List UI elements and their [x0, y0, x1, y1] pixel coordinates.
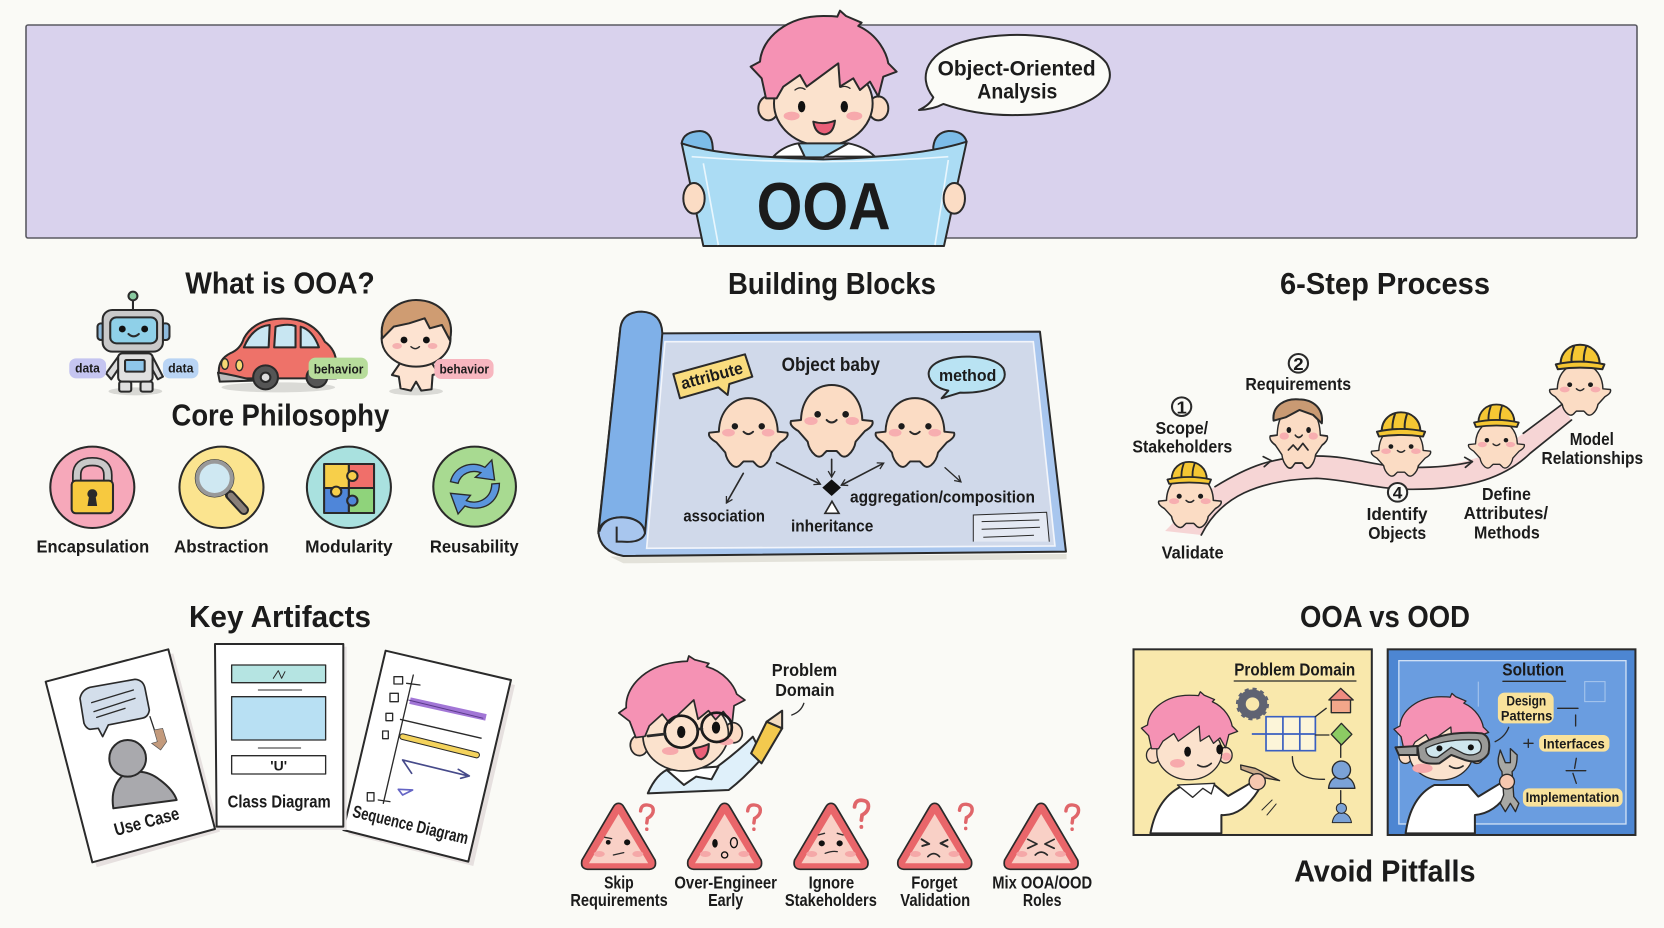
step model label: Relationships — [1542, 447, 1643, 468]
callout: method — [929, 357, 1005, 398]
panel: OOA vs OOD comparison — [1134, 649, 1635, 889]
step baby: requirements — [1270, 399, 1328, 468]
heading: Key Artifacts: Key Artifacts — [189, 599, 371, 634]
card: use case — [46, 649, 220, 867]
step baby: model relationships — [1550, 345, 1611, 415]
icon: abstraction magnifier — [179, 447, 263, 528]
label: Reusability: Reusability — [430, 536, 519, 557]
step 1 label: Scope/ — [1155, 417, 1208, 438]
pitfall: forget validation — [898, 803, 972, 910]
label: Problem Domain — [772, 659, 837, 700]
card: class diagram: Class Diagram — [228, 792, 331, 812]
object baby center — [791, 385, 873, 457]
heading: What is OOA?: What is OOA? — [185, 266, 375, 300]
blueprint sheet — [598, 312, 1067, 563]
step 2 label: Requirements — [1245, 373, 1351, 394]
pitfall: over-engineer early: Early — [708, 890, 743, 910]
step model label: Model — [1570, 428, 1614, 449]
icon: inheritance triangle — [825, 501, 839, 513]
road ribbon — [1165, 405, 1571, 535]
pitfall: mix OOA/OOD roles: Mix OOA/OOD — [992, 873, 1092, 892]
card: use case: Use Case — [112, 803, 181, 840]
step 2 label: 2 — [1293, 353, 1304, 374]
pitfall: ignore stakeholders: Stakeholders — [785, 890, 877, 910]
icon: robot — [97, 292, 169, 395]
scroll banner — [682, 131, 967, 246]
callout: method: method — [939, 366, 996, 385]
step baby: validate — [1159, 462, 1221, 528]
panel: process road with steps — [1132, 345, 1643, 562]
panel: problem domain — [1134, 649, 1372, 835]
card: class diagram: 'U' — [270, 758, 287, 774]
step 4 label: Identify — [1367, 503, 1428, 524]
panel: key artifacts cards — [46, 644, 515, 867]
hero mascot with OOA scroll — [682, 11, 967, 246]
step 4 label: Objects — [1368, 522, 1426, 543]
step define label — [1464, 483, 1548, 542]
step 1 label — [1132, 397, 1232, 457]
mascot with glasses and pencil — [612, 649, 804, 793]
hero banner — [26, 25, 1637, 238]
label: behavior pink — [434, 359, 494, 379]
card: sequence diagram — [343, 651, 515, 866]
step define label: Define — [1482, 483, 1531, 504]
pitfall: skip requirements: Skip — [604, 873, 634, 892]
icon: encapsulation padlock — [50, 447, 134, 528]
panel: solution: Patterns — [1501, 708, 1552, 724]
heading: Building Blocks: Building Blocks — [728, 266, 936, 301]
speech bubble: Object-Oriented Analysis: Analysis — [977, 80, 1057, 104]
section: What is OOA and Core Philosophy — [37, 266, 519, 557]
mascot head — [751, 11, 897, 157]
heading: Core Philosophy: Core Philosophy — [172, 398, 390, 433]
step 4 label: 4 — [1393, 484, 1403, 502]
panel: solution — [1388, 649, 1635, 835]
step validate label: Validate — [1162, 542, 1224, 562]
step define label: Attributes/ — [1464, 502, 1548, 523]
scroll title: OOA — [757, 170, 891, 244]
callout: attribute: attribute — [679, 358, 745, 393]
label: aggregation/composition: aggregation/composition — [850, 487, 1035, 506]
pitfall: ignore stakeholders: Ignore — [809, 873, 854, 892]
speech bubble: Object-Oriented Analysis: Object-Oriented — [938, 56, 1096, 80]
step 2 label — [1245, 353, 1351, 394]
label: data right: data — [168, 361, 194, 376]
label: data left — [69, 358, 106, 378]
step baby: define attributes — [1468, 404, 1524, 468]
step baby: identify objects — [1371, 412, 1431, 476]
speech bubble: Object-Oriented Analysis — [919, 35, 1110, 115]
step define label: Methods — [1474, 522, 1540, 542]
pitfall: forget validation: Forget — [911, 873, 958, 892]
pitfall: mix OOA/OOD roles: Roles — [1023, 890, 1062, 910]
label: behavior green — [309, 358, 368, 379]
panel: solution: Interfaces — [1543, 736, 1605, 752]
pitfall: mix OOA/OOD roles — [992, 803, 1092, 910]
heading: 6-Step Process: 6-Step Process — [1280, 266, 1490, 301]
label: Problem Domain: Domain — [775, 679, 834, 700]
object baby right — [876, 398, 954, 467]
label: behavior pink: behavior — [439, 362, 490, 376]
relationship arrows — [727, 459, 961, 503]
pitfall: ignore stakeholders — [785, 800, 877, 910]
label: Object baby: Object baby — [782, 355, 880, 376]
step 1 label: 1 — [1176, 397, 1187, 417]
panel: solution: Solution — [1502, 660, 1564, 680]
label: Modularity: Modularity — [305, 536, 393, 557]
label: data left: data — [75, 361, 100, 376]
icon: reusability arrows — [433, 447, 516, 527]
label: Problem Domain: Problem — [772, 659, 837, 680]
pitfall: over-engineer early — [674, 803, 777, 910]
panel: building blocks blueprint — [598, 312, 1067, 563]
panel: problem domain: Problem Domain — [1234, 660, 1355, 680]
icon: red car — [218, 319, 336, 392]
pitfall: forget validation: Validation — [900, 890, 970, 910]
label: data right — [163, 358, 198, 378]
heading: Avoid Pitfalls: Avoid Pitfalls — [1294, 854, 1476, 889]
object baby left — [709, 398, 788, 467]
label: association: association — [683, 507, 765, 526]
label: behavior green: behavior — [314, 362, 364, 376]
pitfall: skip requirements — [570, 803, 668, 910]
step 4 label — [1367, 483, 1428, 543]
icon: aggregation diamond — [822, 479, 841, 496]
heading: OOA vs OOD: OOA vs OOD — [1300, 599, 1470, 634]
panel: solution: Design — [1506, 693, 1546, 709]
label: inheritance: inheritance — [791, 517, 873, 536]
pitfall: skip requirements: Requirements — [570, 890, 668, 910]
step 1 label: Stakeholders — [1132, 436, 1232, 457]
panel: avoid pitfalls — [570, 649, 1092, 910]
label: Abstraction: Abstraction — [174, 536, 269, 557]
icon: modularity puzzle — [307, 447, 391, 528]
label: Encapsulation: Encapsulation — [37, 536, 149, 557]
pitfall: over-engineer early: Over-Engineer — [674, 873, 777, 892]
step model label — [1542, 428, 1643, 468]
card: class diagram — [215, 644, 347, 830]
card: sequence diagram: Sequence Diagram — [351, 801, 470, 848]
icon: baby — [382, 300, 451, 395]
panel: solution: Implementation — [1526, 789, 1619, 805]
